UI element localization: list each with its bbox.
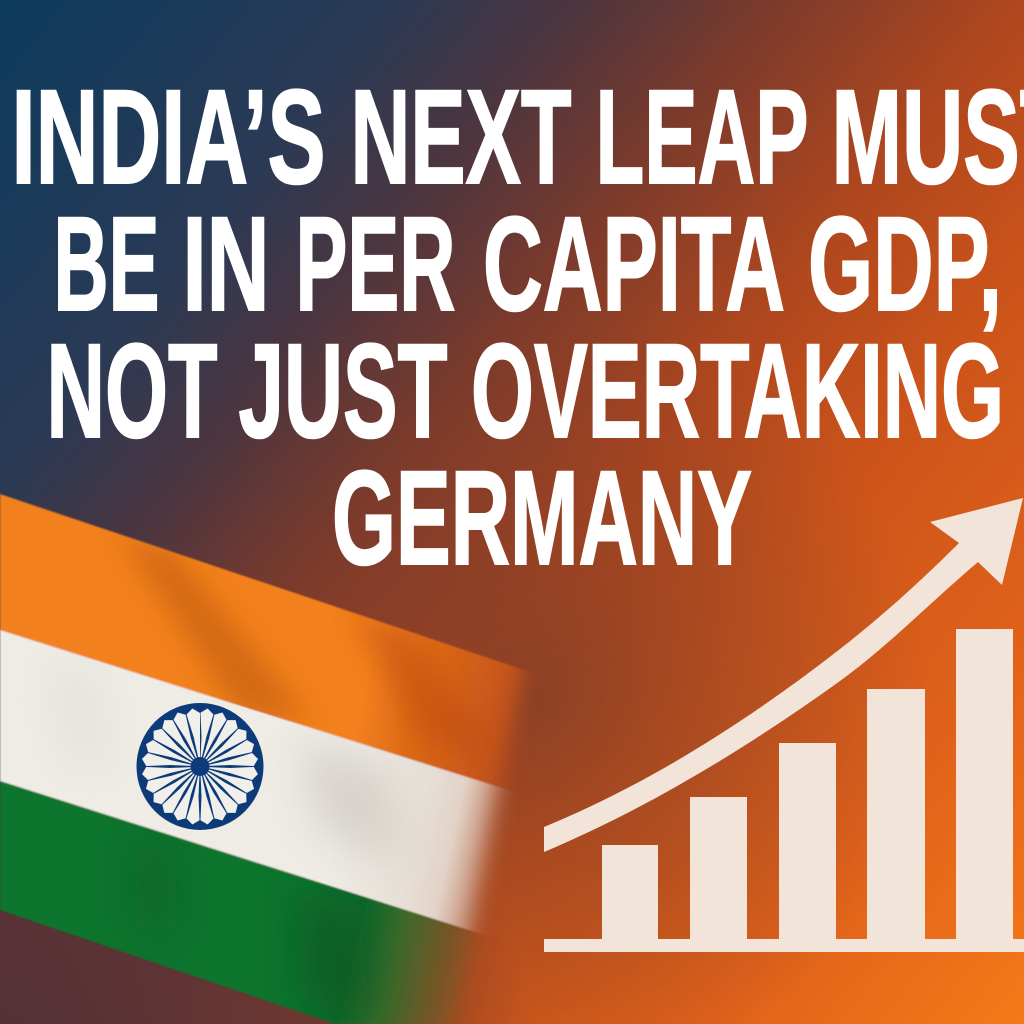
bar 1 [602, 845, 658, 945]
white fold shadows [50, 660, 400, 860]
saffron fold shadows [128, 540, 468, 742]
title line 2: CAPITA [483, 190, 785, 339]
title line 2 [54, 190, 1002, 339]
title line 2: IN [182, 190, 270, 339]
chart baseline [544, 939, 1024, 952]
title line 1 [12, 63, 1024, 212]
background centre shade [150, 310, 930, 1024]
title [12, 63, 1024, 593]
bar 2 [690, 797, 747, 945]
title line 1: INDIA’S [12, 63, 326, 212]
title line 4: GERMANY [332, 444, 752, 593]
title line 2: PER [296, 190, 456, 339]
icon: ashoka chakra [136, 703, 264, 830]
saffron stripe [0, 494, 560, 800]
title line 1: LEAP [596, 63, 808, 212]
title line 2: BE [54, 190, 160, 339]
title line 3 [46, 317, 1004, 466]
white stripe [0, 630, 540, 940]
bar 3 [779, 743, 836, 945]
arrow: upward growth curve [544, 498, 1023, 852]
growth chart [544, 498, 1024, 952]
flag stripes [0, 494, 560, 1024]
title line 1: NEXT [350, 63, 572, 212]
bar 4 [867, 689, 925, 945]
bar 5 [956, 629, 1013, 945]
green fold shadows [130, 835, 370, 1020]
title line 3: JUST [238, 317, 448, 466]
background lower-left shade [0, 560, 540, 1024]
indian flag [0, 494, 560, 1024]
green stripe [0, 781, 500, 1024]
title line 3: NOT [46, 317, 218, 466]
